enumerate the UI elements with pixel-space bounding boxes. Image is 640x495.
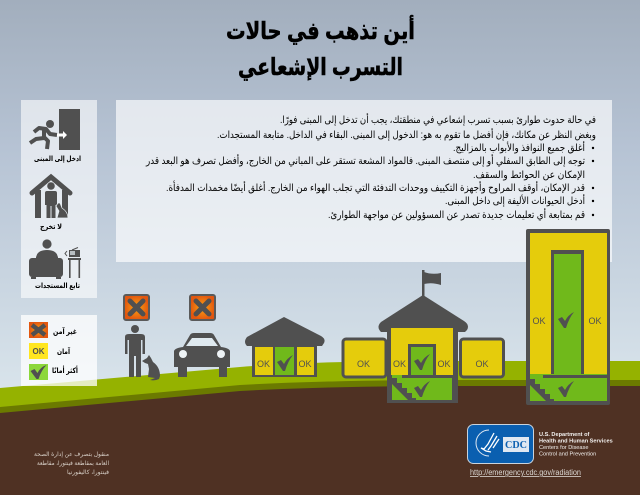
- icon: flag: [422, 270, 441, 296]
- icon: stay inside: [32, 177, 70, 231]
- large building: OK: [393, 359, 406, 369]
- large building: OK: [437, 359, 451, 369]
- credit text: [34, 451, 109, 476]
- panel: legend: [21, 315, 97, 386]
- small house: [245, 317, 325, 377]
- HHS text: Health and Human Services: [539, 438, 613, 444]
- instructions text: أغلق جميع النوافذ والأبواب بالمزاليج.: [453, 141, 585, 154]
- credit text: العامة بمقاطعة فينتورا، مقاطعة: [37, 460, 109, 467]
- icon: dog: [142, 355, 160, 380]
- title: التسرب الإشعاعي: [238, 54, 403, 81]
- ground: [0, 361, 640, 495]
- icon: follow updates: [29, 239, 81, 290]
- tall building: OK: [532, 316, 546, 326]
- unsafe: person and dog: [124, 295, 160, 380]
- credit text: فينتورا، كاليفورنيا: [67, 469, 109, 476]
- small house: OK: [257, 359, 270, 369]
- large building: left annex: OK: [357, 359, 370, 369]
- HHS text: Control and Prevention: [539, 452, 596, 458]
- CDC logo: CDC: [505, 440, 527, 451]
- instructions text: قدر الإمكان، أوقف المراوح وأجهزة التكييف ووحدات التدفئة التي تجلب الهواء من الخارج. أغلق أيضًا مخمدات المدفأة.: [166, 180, 585, 194]
- credit text: منقول بتصرف عن إدارة الصحة: [34, 451, 109, 458]
- icon: car: [174, 333, 230, 377]
- legend: unsafe: غير آمن: [53, 326, 77, 336]
- instructions text: في حالة حدوث طوارئ بسبب تسرب إشعاعي في منطقتك، يجب أن تدخل إلى المبنى فورًا.: [280, 113, 596, 126]
- panel: actions: [21, 100, 97, 298]
- HHS text: [539, 432, 613, 458]
- title: أين تذهب في حالات: [226, 15, 415, 45]
- instructions text: أدخل الحيوانات الأليفة إلى داخل المبنى.: [445, 194, 585, 207]
- icon: X sign: [190, 295, 215, 320]
- instructions text: الإمكان عن الحوائط والسقف.: [473, 170, 585, 181]
- HHS text: U.S. Department of: [539, 432, 589, 438]
- large building: right annex: [460, 339, 504, 377]
- large building: right annex: OK: [475, 359, 489, 369]
- icon: follow updates: تابع المستجدات: [35, 281, 80, 290]
- legend: safe: آمان: [57, 346, 70, 356]
- instructions text: [145, 113, 596, 221]
- icon: X sign: [124, 295, 149, 320]
- tall building: OK: [588, 316, 602, 326]
- unsafe: car: [174, 295, 230, 377]
- icon: enter building: ادخل إلى المبنى: [34, 154, 81, 163]
- legend: safe: [29, 343, 70, 359]
- tall building: [526, 229, 610, 405]
- icon: enter building: [30, 109, 81, 163]
- large building: left annex: [343, 339, 386, 377]
- large building: [378, 270, 468, 403]
- legend: safer: أكثر أمانًا: [52, 365, 78, 375]
- icon: stay inside: لا تخرج: [40, 222, 62, 231]
- URL: http://emergency.cdc.gov/radiation: [470, 468, 581, 477]
- icon: person: [125, 325, 145, 377]
- legend: safe: OK: [32, 347, 45, 356]
- HHS text: Centers for Disease: [539, 445, 588, 451]
- CDC logo: [468, 424, 534, 464]
- instructions text: قم بمتابعة أي تعليمات جديدة تصدر عن المسؤولين عن مواجهة الطوارئ.: [328, 208, 585, 221]
- small house: OK: [298, 359, 312, 369]
- panel: instructions: [116, 100, 612, 262]
- title: [226, 15, 415, 81]
- instructions text: توجه إلى الطابق السفلي أو إلى منتصف المبنى. فالمواد المشعة تستقر على المباني من الخارج، وأفضل تصرف هو البعد قدر: [145, 154, 585, 167]
